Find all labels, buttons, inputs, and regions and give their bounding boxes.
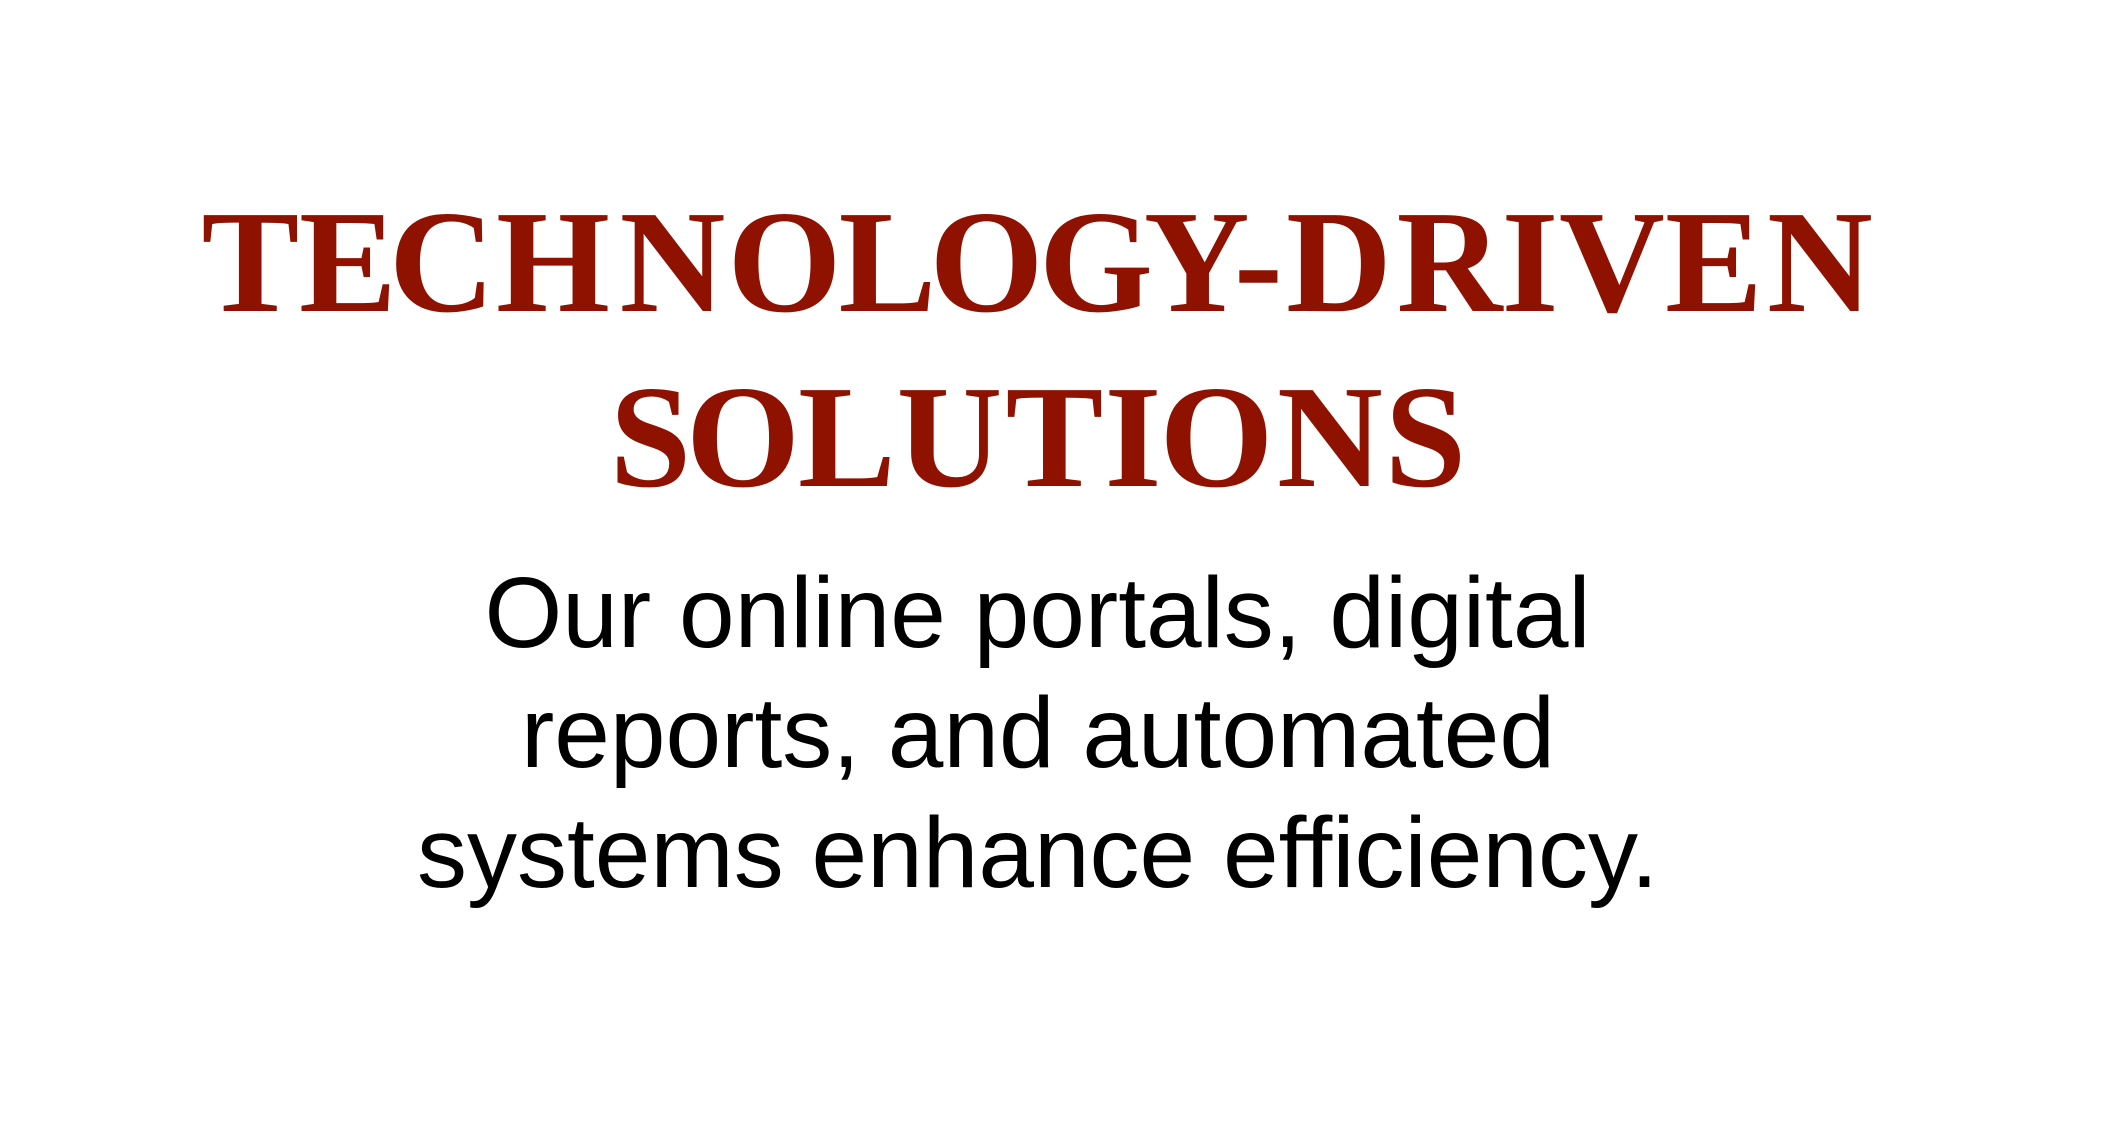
title: SOLUTIONS (610, 355, 1466, 518)
body text: Our online portals, digital (484, 557, 1591, 669)
title: TECHNOLOGY-DRIVEN (202, 180, 1873, 343)
body text (417, 557, 1658, 909)
title (202, 180, 1873, 518)
body text: systems enhance efficiency. (417, 797, 1658, 909)
body text: reports, and automated (521, 677, 1555, 789)
